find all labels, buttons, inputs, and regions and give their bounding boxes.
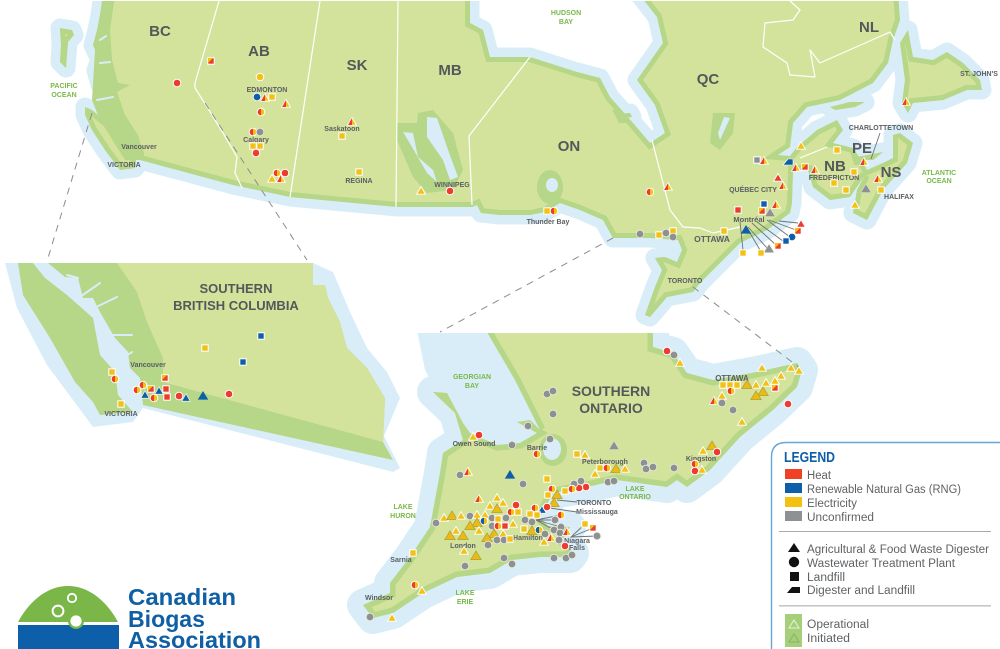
city labels: REGINA	[345, 178, 373, 185]
water halo	[60, 0, 982, 317]
digester and landfill marker	[783, 159, 793, 165]
city labels: Saskatoon	[324, 126, 360, 133]
mainland interior	[117, 263, 385, 442]
city labels: HALIFAX	[884, 194, 914, 201]
main map of Canada	[60, 0, 982, 317]
province labels	[149, 19, 901, 181]
water labels: ONTARIO	[619, 494, 651, 501]
inset connector lines	[48, 103, 800, 368]
water labels: LAKE	[455, 590, 475, 597]
coastal band	[60, 0, 982, 317]
status key: Initiated	[807, 633, 850, 645]
city labels: Mississauga	[576, 509, 618, 516]
city labels: VICTORIA	[107, 162, 141, 169]
city labels: Calgary	[243, 137, 269, 144]
inset map: southern British Columbia	[5, 263, 400, 472]
province labels: NL	[859, 19, 879, 36]
water labels: LAKE	[393, 504, 413, 511]
land mass	[363, 320, 802, 618]
province labels: MB	[438, 62, 462, 79]
province labels: QC	[697, 71, 719, 88]
water labels: GEORGIAN	[453, 374, 491, 381]
city labels: Windsor	[365, 595, 393, 602]
facility shape key	[787, 543, 989, 597]
city labels: Vancouver	[121, 144, 157, 151]
markers: southern Ontario	[366, 347, 803, 621]
divider two	[779, 605, 991, 607]
lake Simcoe	[539, 434, 567, 466]
inset heading line two: BRITISH COLUMBIA	[173, 298, 299, 313]
markers: southern British Columbia	[109, 333, 264, 407]
southern Ontario heading: SOUTHERN	[572, 383, 650, 399]
divider one	[779, 531, 991, 532]
city labels: Montréal	[733, 215, 765, 224]
city labels: TORONTO	[668, 278, 703, 285]
city labels: WINNIPEG	[434, 182, 470, 189]
city labels: FREDERICTON	[809, 175, 859, 182]
land mass	[60, 0, 982, 317]
inset map: southern Ontario	[363, 320, 802, 618]
inset heading: SOUTHERN	[200, 281, 272, 296]
fuel colour key: Unconfirmed	[807, 512, 874, 524]
markers: western and central Canada	[173, 58, 727, 241]
water halo	[363, 320, 802, 618]
fuel colour key: Electricity	[807, 498, 857, 510]
fuel colour key: Heat	[807, 470, 832, 482]
city labels: QUÉBEC CITY	[729, 185, 777, 194]
province labels: SK	[347, 57, 368, 74]
water labels: LAKE	[625, 486, 645, 493]
lake Mistassini	[710, 113, 735, 150]
legend title: LEGEND	[784, 450, 835, 466]
water	[5, 263, 400, 472]
leader lines	[536, 133, 880, 537]
logo wordmark: Biogas	[128, 606, 205, 632]
status key: Operational	[807, 619, 869, 631]
province labels: ON	[558, 138, 580, 155]
city labels: London	[450, 543, 476, 550]
BC coast band	[92, 0, 145, 160]
city labels: Sarnia	[390, 557, 412, 564]
lake Nipigon	[537, 170, 563, 204]
city labels: VICTORIA	[104, 411, 138, 418]
lake Winnipeg area	[397, 110, 463, 193]
mainland coast band	[48, 263, 393, 460]
water labels: BAY	[559, 19, 573, 26]
provincial borders	[195, 1, 895, 233]
Vancouver Island	[18, 263, 133, 415]
logo wordmark	[128, 584, 261, 649]
logo wordmark: Canadian	[128, 584, 236, 610]
water labels: OCEAN	[51, 92, 77, 99]
BC coast inlets	[97, 36, 113, 100]
province labels: NS	[881, 164, 901, 181]
coastal band	[363, 320, 802, 618]
city labels: Hamilton	[513, 535, 543, 542]
southern Ontario heading: ONTARIO	[579, 400, 643, 416]
city labels: Falls	[569, 545, 585, 552]
water labels: BAY	[465, 383, 479, 390]
city labels: Thunder Bay	[527, 219, 569, 226]
province labels: BC	[149, 23, 171, 40]
province labels: AB	[248, 43, 270, 60]
city labels	[104, 71, 998, 602]
city labels: Niagara	[564, 538, 590, 545]
city labels: EDMONTON	[247, 87, 287, 94]
water labels: HURON	[390, 513, 416, 520]
southern Ontario heading	[572, 383, 650, 416]
water labels: HUDSON	[551, 10, 581, 17]
status key	[785, 614, 869, 647]
logo: Canadian Biogas Association	[18, 584, 261, 649]
city labels: CHARLOTTETOWN	[849, 125, 913, 132]
facility shape key: Agricultural & Food Waste Digester	[807, 544, 989, 556]
city labels: Vancouver	[130, 362, 166, 369]
mainland inlets	[67, 275, 132, 358]
Georgian Bay water	[418, 333, 510, 429]
markers: Quebec and Atlantic Canada	[735, 98, 910, 256]
water labels: PACIFIC	[50, 83, 78, 90]
legend box	[772, 442, 1000, 649]
city labels: TORONTO	[577, 500, 612, 507]
water labels: OCEAN	[926, 178, 952, 185]
water labels: ERIE	[457, 599, 473, 606]
facility shape key: Landfill	[807, 572, 845, 584]
water labels: ATLANTIC	[922, 170, 956, 177]
fuel colour key: Renewable Natural Gas (RNG)	[807, 484, 961, 496]
province labels: NB	[824, 158, 846, 175]
city labels: OTTAWA	[715, 374, 749, 383]
fuel colour key	[785, 469, 961, 524]
city labels: ST. JOHN'S	[960, 71, 998, 78]
facility shape key: Wastewater Treatment Plant	[807, 558, 956, 570]
city labels: Kingston	[686, 456, 716, 463]
city labels: Peterborough	[582, 459, 628, 466]
city labels: OTTAWA	[694, 234, 730, 244]
legend panel	[772, 442, 1000, 649]
city labels: Barrie	[527, 445, 547, 452]
logo mark	[18, 586, 119, 649]
city labels: Owen Sound	[453, 441, 495, 448]
facility shape key: Digester and Landfill	[807, 585, 915, 597]
province labels: PE	[852, 140, 872, 157]
